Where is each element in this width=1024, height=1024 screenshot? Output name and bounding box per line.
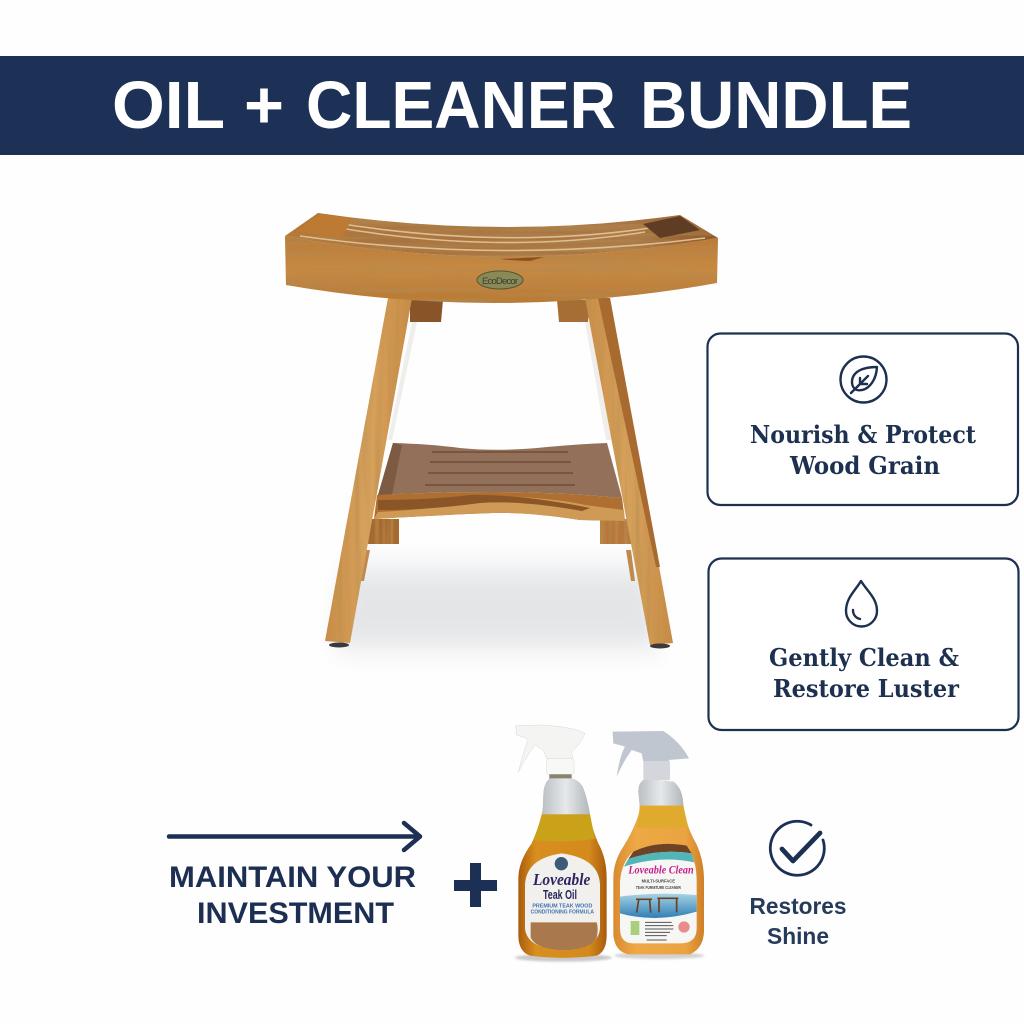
right leg xyxy=(585,298,673,645)
brass badge xyxy=(477,271,523,289)
seat front face xyxy=(285,236,718,303)
maintain your investment text: INVESTMENT xyxy=(197,897,394,930)
maintain your investment text xyxy=(169,861,416,930)
card text: Gently Clean & xyxy=(769,643,959,672)
clear plastic shoulder xyxy=(542,778,590,814)
brass badge: EcoDecor xyxy=(482,276,518,287)
restores shine text xyxy=(750,893,846,949)
maintain your investment text: MAINTAIN YOUR xyxy=(169,861,416,894)
collar xyxy=(643,761,670,780)
left foot xyxy=(329,642,349,648)
card: nourish and protect xyxy=(708,334,1018,505)
cleaner level band xyxy=(636,806,688,828)
arrow xyxy=(169,823,420,850)
title: + xyxy=(244,68,284,143)
oil level band xyxy=(533,814,595,841)
shelf front lip xyxy=(374,492,625,521)
label: TEAK FURNITURE CLEANER xyxy=(636,885,681,891)
sprayer xyxy=(613,731,689,777)
bottle: cleaner xyxy=(613,731,704,959)
right foot xyxy=(650,644,670,648)
sprayer xyxy=(516,725,585,772)
back leg slivers xyxy=(361,550,635,581)
label: MULTI-SURFACE xyxy=(642,878,676,884)
restores shine text: Shine xyxy=(767,923,829,949)
label: CONDITIONING FORMULA xyxy=(531,910,594,916)
lower braces xyxy=(368,519,399,544)
card: gently clean xyxy=(708,558,1018,730)
bottle shadow xyxy=(614,952,704,959)
restores shine text: Restores xyxy=(750,893,846,919)
seat top face xyxy=(285,213,718,257)
collar xyxy=(547,758,574,774)
upper braces xyxy=(410,300,443,322)
bottle body xyxy=(613,780,704,954)
label: Loveable xyxy=(532,870,591,889)
stool photo xyxy=(285,213,718,662)
lower shelf xyxy=(374,443,625,521)
label: Teak Oil xyxy=(543,888,577,902)
title: OIL xyxy=(112,68,225,143)
icon: water drop xyxy=(846,581,877,626)
title xyxy=(112,68,912,143)
left leg xyxy=(325,298,412,643)
title: CLEANER xyxy=(306,68,616,143)
card: nourish and protect: Wood Grain xyxy=(789,451,940,480)
faint inner leg panels xyxy=(388,322,612,440)
label: Loveable Clean xyxy=(627,862,694,876)
bottle body xyxy=(518,778,607,958)
label xyxy=(620,844,697,943)
label: PREMIUM TEAK WOOD xyxy=(532,904,592,910)
icon: leaf xyxy=(840,356,886,402)
title banner xyxy=(0,56,1024,155)
clear plastic shoulder xyxy=(638,780,683,806)
label xyxy=(525,853,600,950)
card: gently clean: Restore Luster xyxy=(773,674,960,703)
bottle shadow xyxy=(515,954,612,962)
title: BUNDLE xyxy=(640,68,912,143)
card text: Nourish & Protect xyxy=(750,420,977,449)
bottle: teak oil xyxy=(515,725,612,962)
icon: plus xyxy=(454,863,497,907)
floor shadow xyxy=(335,552,662,662)
icon: check in circle xyxy=(770,821,824,875)
